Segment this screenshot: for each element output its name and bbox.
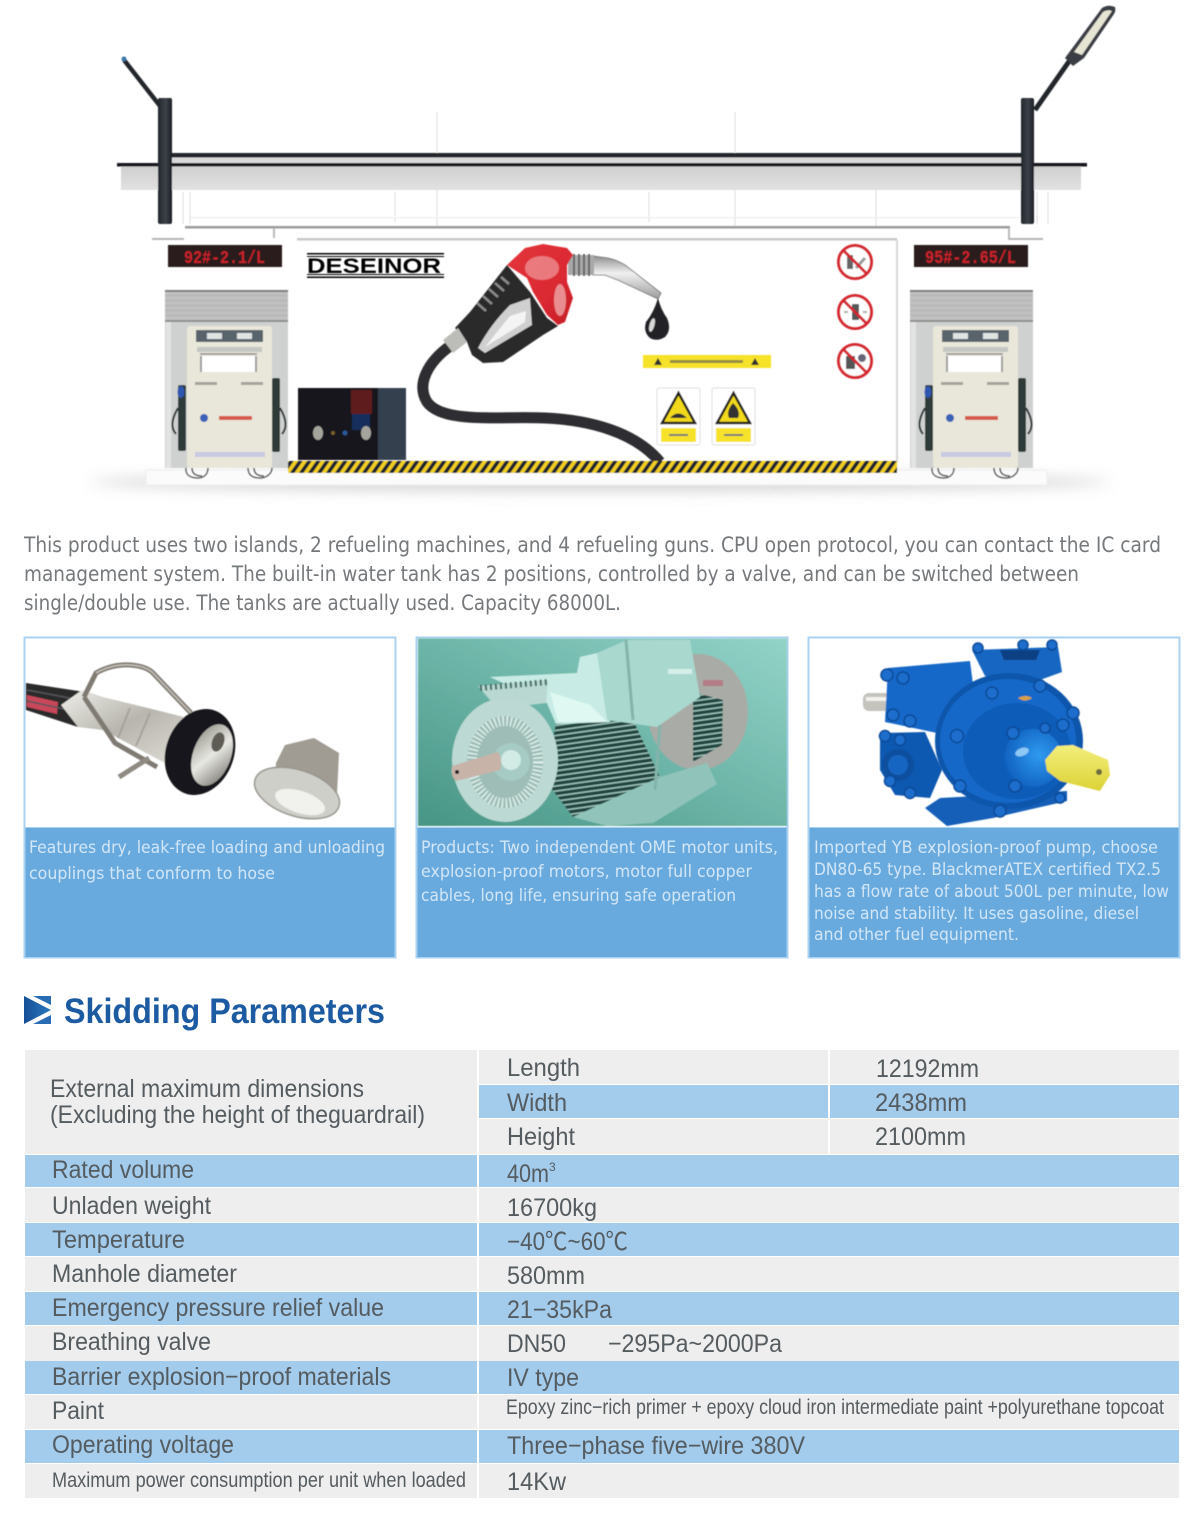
table labels: Temperature (52, 1226, 185, 1254)
caption background: couplings (25, 828, 395, 958)
table values: −295Pa~2000Pa (608, 1330, 782, 1358)
left lamp post (122, 56, 172, 224)
caption: pump (814, 838, 1169, 944)
table values: 21−35kPa (507, 1296, 612, 1324)
parameters table (25, 1050, 1179, 1498)
heading: Skidding Parameters: Skidding Parameters (64, 992, 385, 1031)
table values: 14Kw (507, 1468, 567, 1496)
panel: motor (416, 638, 788, 958)
table labels: Unladen weight (52, 1192, 211, 1220)
right lamp post (1021, 6, 1115, 224)
table values: IV type (507, 1364, 579, 1392)
table labels: Maximum power consumption per unit when loaded (52, 1469, 466, 1492)
panel: couplings (24, 638, 396, 958)
table labels: Manhole diameter (52, 1260, 237, 1288)
table values: Three−phase five−wire 380V (507, 1432, 805, 1460)
table labels: Barrier explosion−proof materials (52, 1363, 391, 1391)
valve compartment photo (298, 388, 406, 460)
logo: DESEINOR: DESEINOR (307, 255, 441, 278)
table labels: Operating voltage (52, 1431, 234, 1459)
left price display: 92#-2.1/L (184, 249, 265, 269)
caption: pump: has a flow rate of about 500L per minute, low (814, 882, 1169, 901)
right dispenser bay (910, 290, 1033, 478)
caption: motor (421, 838, 778, 905)
table values: DN50 (507, 1330, 566, 1358)
caption: couplings (29, 838, 385, 883)
table values: 2438mm (875, 1089, 967, 1117)
prohibition sign: no fire (838, 344, 872, 378)
pump bolts (880, 640, 1079, 817)
intro paragraph (23, 533, 1161, 615)
caption: motor: explosion-proof motors, motor full copper (421, 862, 752, 881)
table values: −40℃~60℃ (507, 1228, 628, 1256)
fuel nozzle (443, 244, 669, 363)
prohibition sign: no smoking (838, 246, 872, 278)
table values: 16700kg (507, 1194, 597, 1222)
table labels: Paint (52, 1397, 104, 1425)
caption: motor: cables, long life, ensuring safe operation (421, 886, 736, 905)
table values (506, 1054, 1164, 1496)
panel: pump (808, 638, 1180, 958)
left dispenser bay (165, 290, 288, 478)
photo: explosion-proof motor (418, 638, 787, 826)
icon: section arrow (24, 996, 51, 1024)
warning card: hot surface (657, 388, 700, 445)
hazard stripe (288, 461, 897, 473)
canopy roof (117, 112, 1087, 226)
photo: hose coupling and cap (26, 665, 346, 828)
intro paragraph: management system. The built-in water tank has 2 positions, controlled by a valve, and can be switched between (24, 562, 1079, 586)
caption: pump: and other fuel equipment. (814, 925, 1019, 944)
station frame (152, 226, 1043, 462)
table values: 580mm (507, 1262, 585, 1290)
table values: 2100mm (875, 1123, 966, 1151)
table labels (50, 1075, 466, 1492)
intro paragraph: single/double use. The tanks are actually used. Capacity 68000L. (24, 591, 621, 615)
caption: pump: Imported YB explosion-proof pump, choose (814, 838, 1158, 857)
table labels: Breathing valve (52, 1328, 211, 1356)
table labels: Rated volume (52, 1156, 194, 1184)
caption: couplings: couplings that conform to hose (29, 864, 275, 883)
table values: Length (507, 1054, 580, 1082)
caption: pump: DN80-65 type. BlackmerATEX certified TX2.5 (814, 860, 1161, 879)
caption background: pump (809, 828, 1179, 958)
caption: motor: Products: Two independent OME motor units, (421, 838, 778, 857)
base skid (146, 470, 1047, 485)
caption: couplings: Features dry, leak-free loading and unloading (29, 838, 385, 857)
right price display: 95#-2.65/L (925, 249, 1016, 269)
table labels: (Excluding the height of theguardrail) (50, 1101, 425, 1129)
caption: pump: noise and stability. It uses gasoline, diesel (814, 904, 1139, 923)
photo: blue gear pump (863, 640, 1110, 826)
warning card: flammable (712, 388, 755, 445)
table labels: Emergency pressure relief value (52, 1294, 384, 1322)
caption background: motor (417, 828, 787, 958)
yellow warning strip (643, 355, 771, 368)
ground shadow (90, 473, 1110, 491)
table values: 40m (507, 1160, 549, 1188)
table row backgrounds (25, 1050, 1179, 1498)
table labels: External maximum dimensions (50, 1075, 364, 1103)
illustration: skid-mounted fuel station (90, 6, 1115, 491)
table values: Width (507, 1089, 567, 1117)
table values: 12192mm (876, 1055, 979, 1083)
table values: Height (507, 1123, 575, 1151)
prohibition sign: no phones (838, 296, 872, 328)
table values: 3 (549, 1160, 556, 1174)
fuel hose (423, 346, 660, 462)
